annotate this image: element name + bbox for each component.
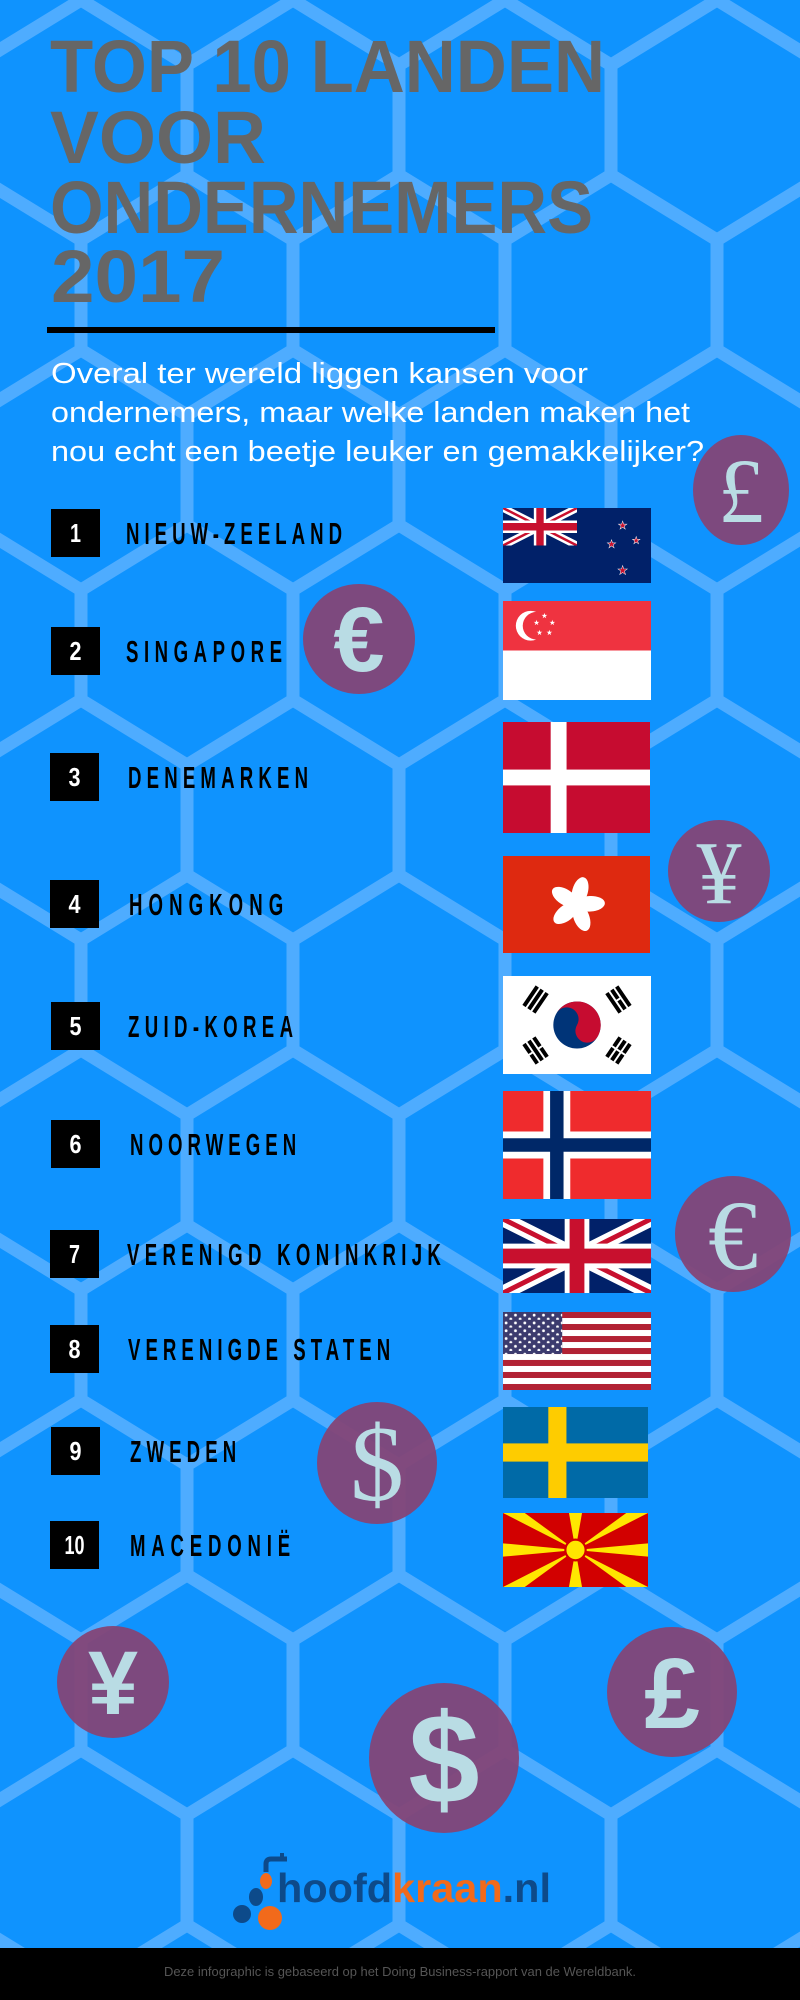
coin: dollar bottom center [369, 1683, 519, 1833]
rank 7: Verenigd Koninkrijk: 7 [69, 1239, 80, 1269]
coin: pound top right: £ [718, 440, 764, 542]
rank 8: Verenigde Staten: VERENIGDE STATEN [128, 1333, 390, 1367]
flag: Hong Kong [503, 856, 650, 953]
flag: North Macedonia [503, 1513, 648, 1587]
flag: United Kingdom [503, 1219, 651, 1293]
coin: pound top right [693, 435, 789, 545]
flag: South Korea [503, 976, 651, 1074]
rank 1: Nieuw-Zeeland: NIEUW-ZEELAND [126, 517, 342, 551]
rank 2: Singapore: SINGAPORE [126, 635, 282, 669]
rank 4: Hongkong: 4 [68, 889, 81, 919]
flag: United States [503, 1312, 651, 1390]
coin: yen right [668, 820, 770, 923]
title: TOP 10 LANDEN [50, 25, 605, 108]
logo: hoofdkraan.nl [233, 1853, 551, 1930]
rank 7: Verenigd Koninkrijk [50, 1230, 441, 1278]
coin: yen bottom left: ¥ [88, 1634, 138, 1734]
coin: pound bottom right: £ [644, 1638, 700, 1750]
coin: dollar bottom center: $ [408, 1688, 480, 1831]
rank 2: Singapore: 2 [70, 636, 82, 666]
title: VOOR [50, 96, 266, 179]
rank 4: Hongkong: HONGKONG [129, 888, 283, 922]
logo: hoofdkraan.nl: hoofdkraan.nl [277, 1865, 551, 1911]
rank 1: Nieuw-Zeeland: 1 [70, 518, 81, 548]
coin: euro lower right [675, 1176, 791, 1292]
subtitle: ondernemers, maar welke landen maken het [51, 397, 690, 429]
rank 8: Verenigde Staten: 8 [68, 1334, 80, 1364]
ranking list [50, 509, 441, 1569]
rank 9: Zweden: ZWEDEN [130, 1435, 236, 1469]
title [50, 25, 605, 318]
rank 6: Noorwegen: 6 [70, 1129, 82, 1159]
flag: Singapore [503, 601, 651, 700]
subtitle: nou echt een beetje leuker en gemakkelijker? [51, 436, 704, 468]
coin: euro near Singapore [303, 584, 415, 694]
title: ONDERNEMERS [50, 166, 593, 249]
flag: Denmark [503, 722, 650, 833]
flag: Norway [503, 1091, 651, 1199]
flag: Sweden [503, 1407, 648, 1498]
rank 3: Denemarken: DENEMARKEN [128, 761, 308, 795]
coin: euro near Singapore: € [333, 589, 385, 691]
title: 2017 [51, 235, 225, 318]
subtitle: Overal ter wereld liggen kansen voor [51, 358, 588, 390]
coin: yen bottom left [57, 1626, 169, 1738]
coin: euro lower right: € [708, 1180, 758, 1291]
coin: dollar middle: $ [350, 1405, 404, 1524]
title underline [47, 327, 495, 333]
rank 7: Verenigd Koninkrijk: VERENIGD KONINKRIJK [127, 1238, 441, 1272]
rank 6: Noorwegen [51, 1120, 296, 1168]
icon: faucet and people [233, 1853, 287, 1930]
rank 10: Macedonië [50, 1521, 290, 1569]
rank 5: Zuid-Korea [51, 1002, 293, 1050]
coin: yen right: ¥ [696, 824, 742, 923]
rank 3: Denemarken [50, 753, 308, 801]
footer bar [0, 1948, 800, 2000]
rank 9: Zweden [51, 1427, 236, 1475]
rank 10: Macedonië: MACEDONIË [130, 1529, 290, 1563]
coin: pound bottom right [607, 1627, 737, 1757]
footer bar: Deze infographic is gebaseerd op het Doing Business-rapport van de Wereldbank. [164, 1964, 636, 1979]
rank 5: Zuid-Korea: ZUID-KOREA [128, 1010, 293, 1044]
rank 5: Zuid-Korea: 5 [70, 1011, 82, 1041]
rank 4: Hongkong [50, 880, 283, 928]
rank 9: Zweden: 9 [70, 1436, 82, 1466]
rank 8: Verenigde Staten [50, 1325, 390, 1373]
subtitle [51, 358, 704, 468]
rank 1: Nieuw-Zeeland [51, 509, 342, 557]
rank 6: Noorwegen: NOORWEGEN [130, 1128, 296, 1162]
flag: New Zealand [503, 508, 651, 583]
coin: dollar middle [317, 1402, 437, 1524]
rank 10: Macedonië: 10 [64, 1530, 84, 1560]
rank 2: Singapore [51, 627, 282, 675]
rank 3: Denemarken: 3 [68, 762, 80, 792]
